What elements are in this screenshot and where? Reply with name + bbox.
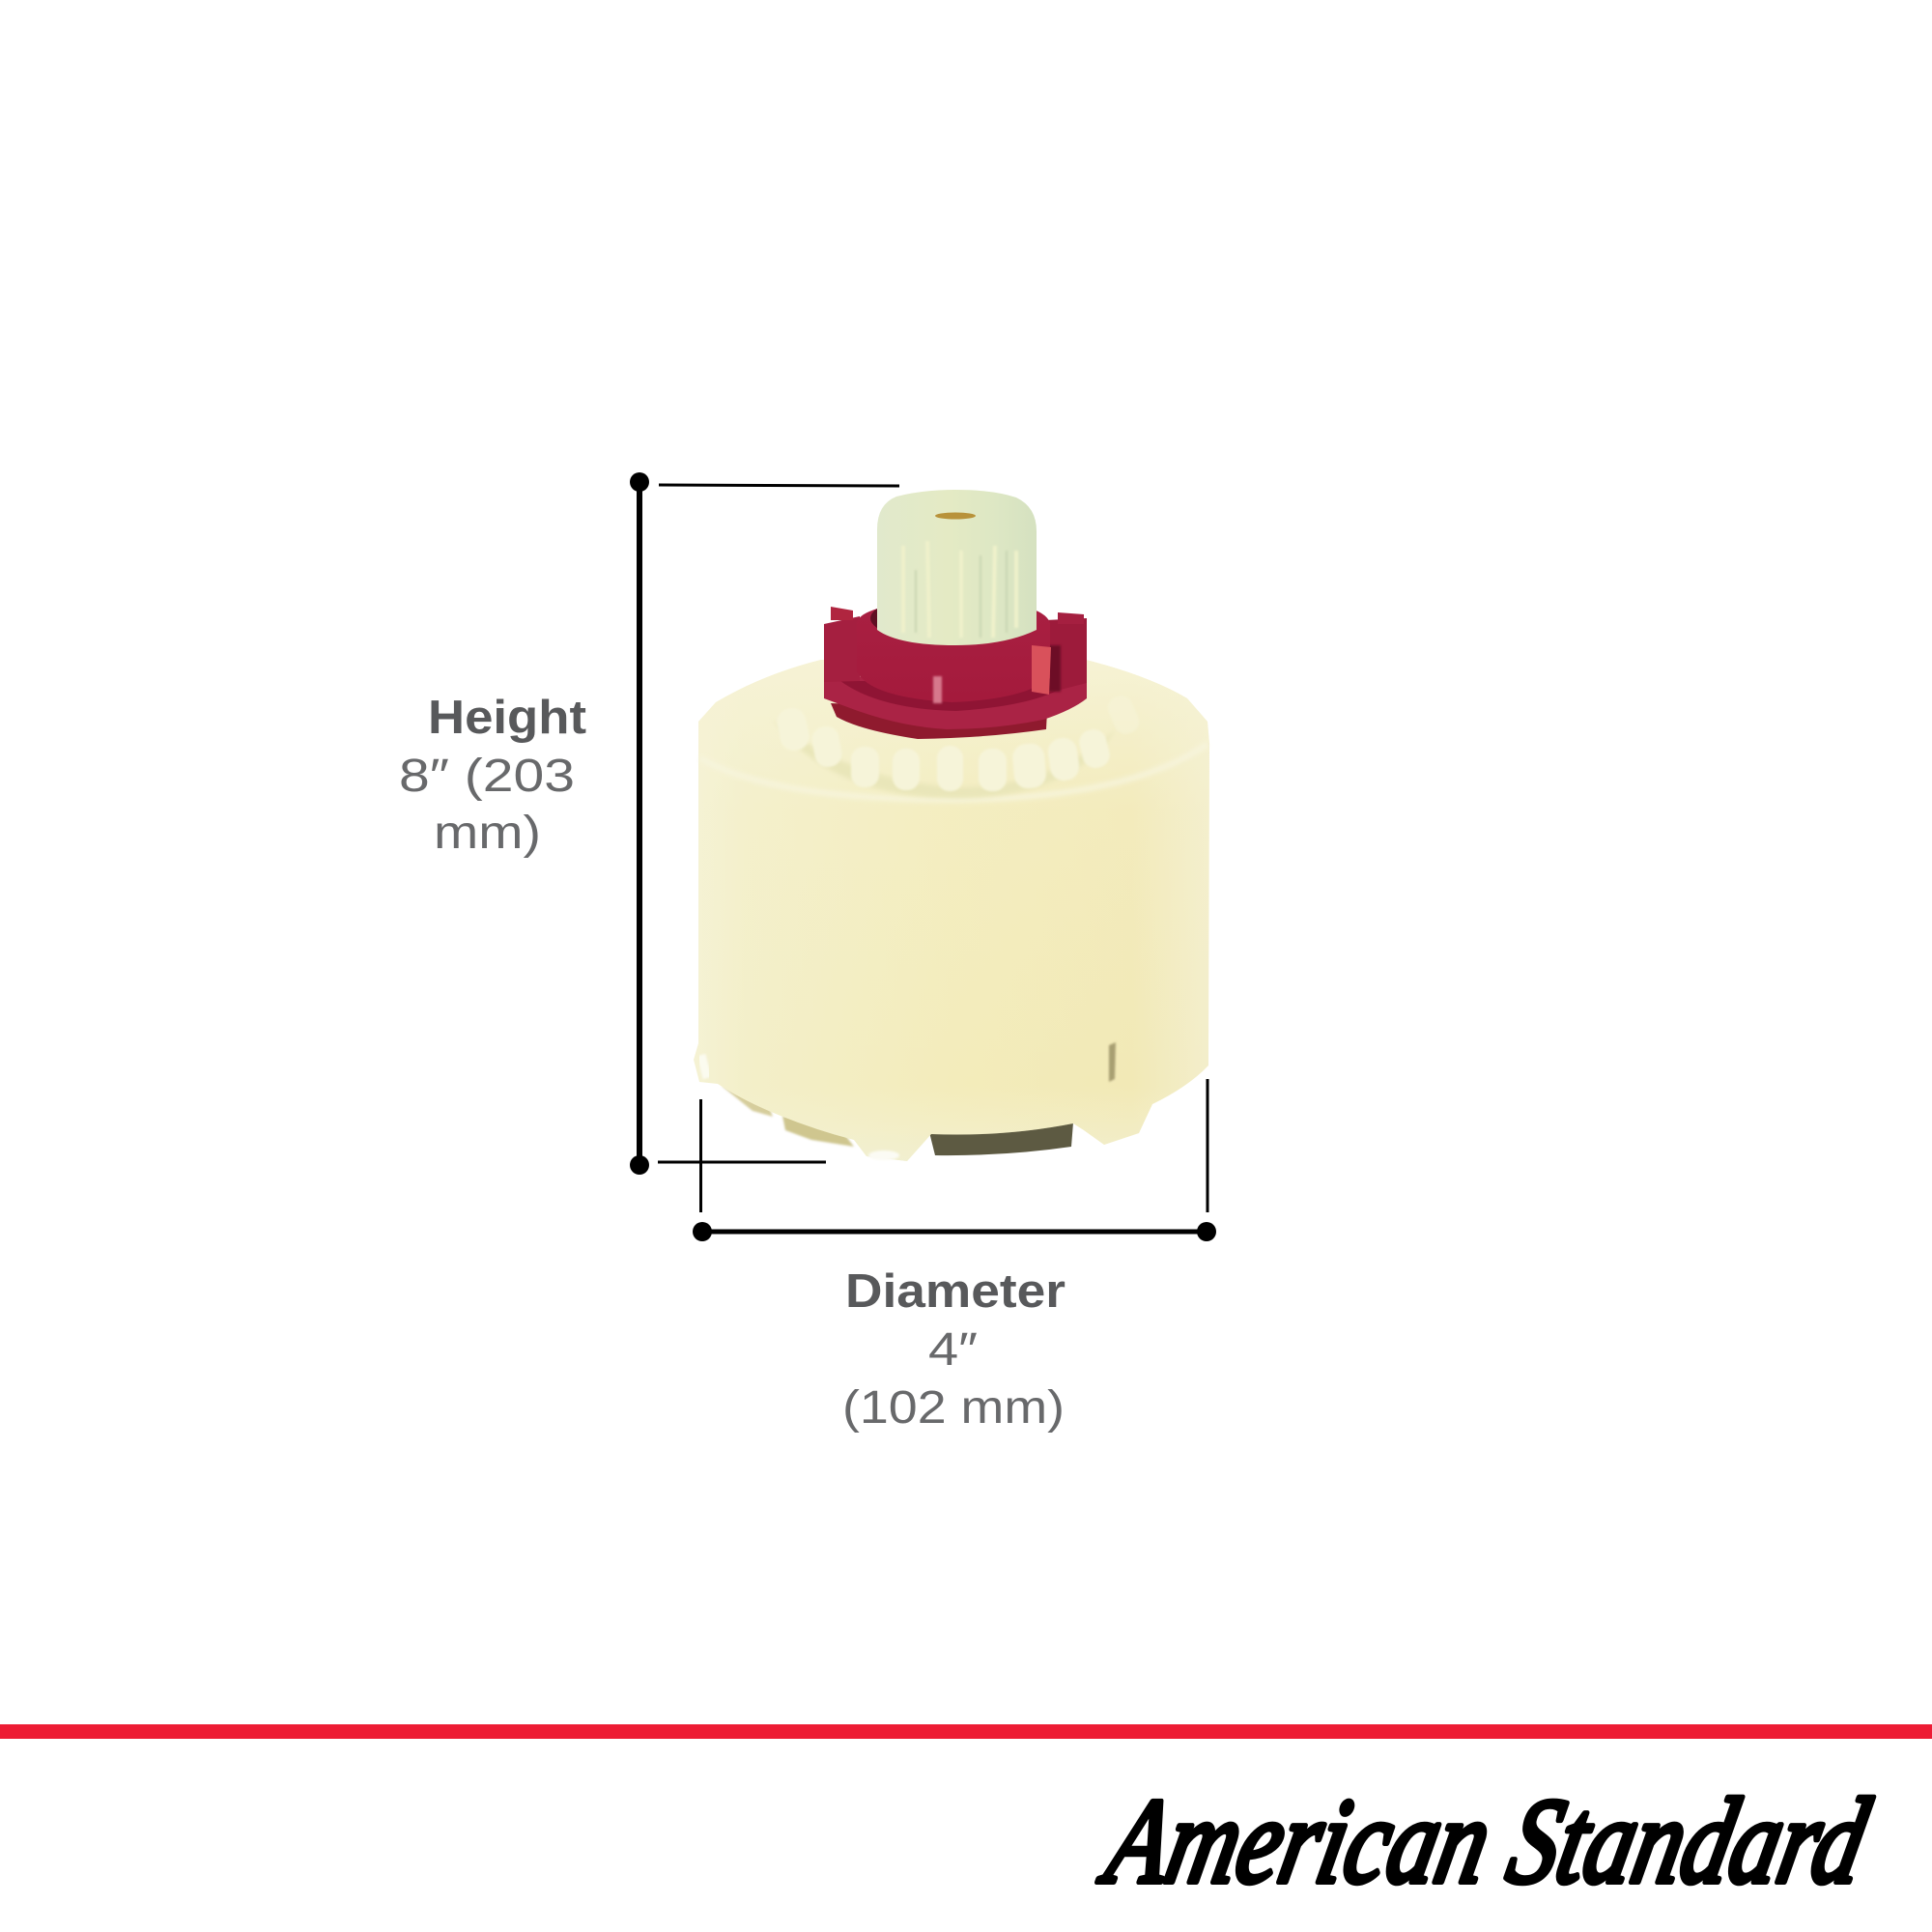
diameter dimension bracket [693,1079,1216,1241]
cartridge main body [694,660,1209,1161]
diameter label: (102 mm) [842,1382,1065,1434]
diameter label: 4″ [928,1324,978,1376]
cartridge gear tooth shapes [775,692,1143,791]
cartridge brass hole [935,512,976,520]
height label: mm) [434,808,541,859]
product photo: cartridge [694,490,1209,1161]
cartridge dark base piece [929,1122,1073,1155]
diameter label: Diameter [845,1265,1065,1318]
cartridge gear teeth shadow [773,720,1116,798]
height label [399,692,586,859]
height dimension bracket [630,472,899,1175]
diameter label [842,1265,1065,1434]
cartridge tan base pieces [722,1086,854,1147]
cartridge green stem [877,490,1037,645]
height label: 8″ (203 [399,751,575,802]
cartridge red collar [824,594,1087,739]
height label: Height [428,692,586,744]
red footer bar [0,1724,1932,1739]
